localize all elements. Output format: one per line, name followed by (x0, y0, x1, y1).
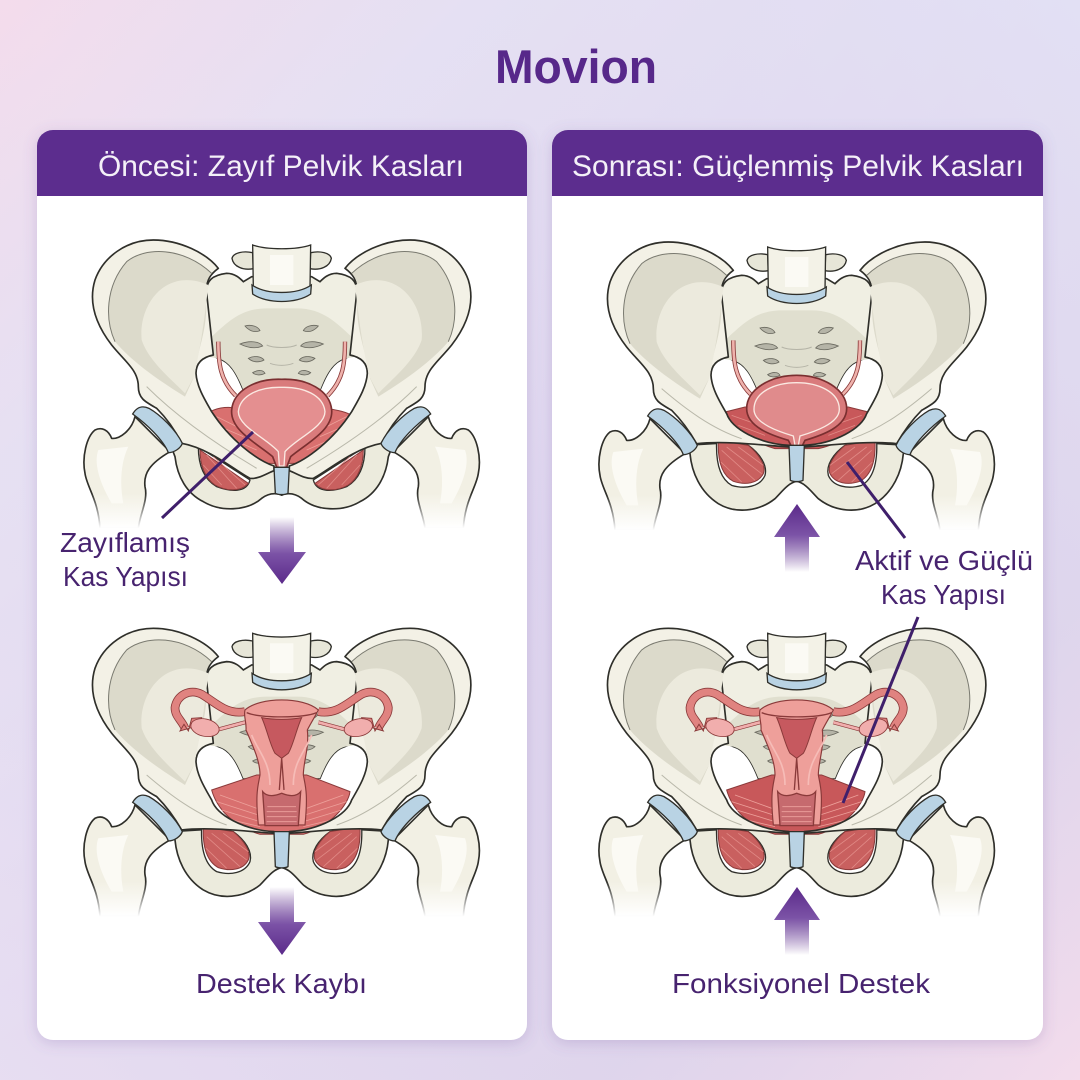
arrow: down (258, 517, 306, 584)
header: before (37, 130, 527, 196)
illustration: pelvis with bladder, weak muscles (84, 240, 479, 528)
panel: after (strengthened pelvic muscles) (552, 130, 1043, 1040)
card background: after (552, 130, 1043, 1040)
label: functional support: Fonksiyonel Destek (672, 968, 931, 999)
leader line: strong pelvic floor (843, 617, 918, 803)
label: active and strong muscle structure (855, 545, 1033, 610)
illustration: pelvis with bladder, strong muscles (599, 242, 994, 530)
arrow: up (774, 504, 820, 572)
label: active and strong muscle structure: Aktif ve Güçlü (855, 545, 1033, 576)
label: weakened muscle structure (60, 527, 190, 592)
illustration: pelvis with uterus, loss of support (84, 628, 479, 917)
header: after (552, 130, 1043, 196)
header: after: Sonrası: Güçlenmiş Pelvik Kasları (572, 150, 1024, 183)
arrow: down (258, 887, 306, 955)
label: loss of support: Destek Kaybı (196, 968, 367, 999)
leader line: weak muscles (162, 432, 253, 518)
leader line: active muscles (847, 462, 905, 538)
card background: before (37, 130, 527, 1040)
arrow: up (774, 887, 820, 955)
label: active and strong muscle structure: Kas Yapısı (881, 579, 1006, 610)
label: weakened muscle structure: Zayıflamış (60, 527, 190, 558)
panel: before (weak pelvic muscles) (37, 130, 527, 1040)
header: before: Öncesi: Zayıf Pelvik Kasları (98, 150, 464, 183)
title: Movion (495, 40, 657, 93)
label: weakened muscle structure: Kas Yapısı (63, 561, 188, 592)
illustration: pelvis with uterus, functional support (599, 628, 994, 917)
